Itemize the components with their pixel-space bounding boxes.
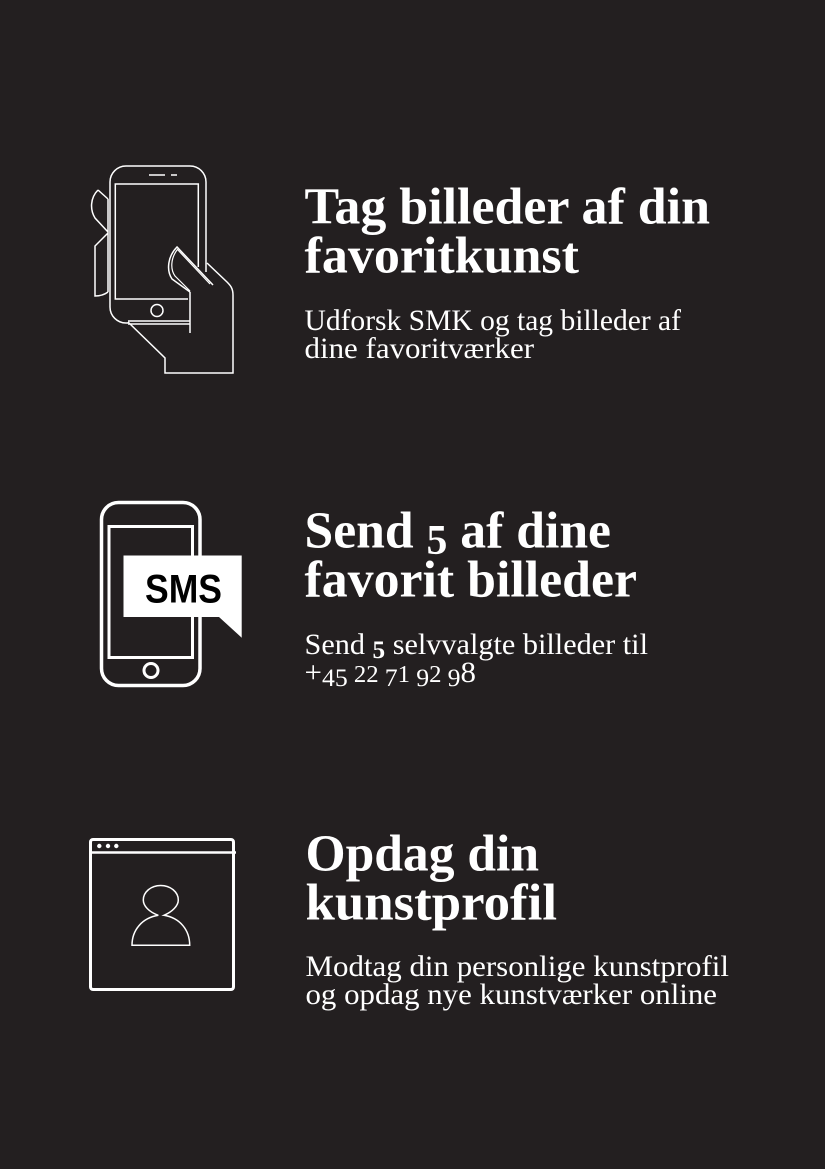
icon: phone with SMS bubble — [102, 502, 242, 686]
text: step 2 description: 1 — [398, 662, 416, 688]
text: step 1 description — [304, 304, 681, 365]
heading: step 3: kunstprofil — [306, 874, 557, 932]
heading: step 3: Opdag din — [306, 826, 539, 882]
icon: hand holding phone — [92, 166, 233, 373]
heading: step 1 — [304, 178, 710, 284]
text: step 3 description — [306, 950, 729, 1011]
text: step 3 description: og opdag nye kunstværker online — [306, 978, 717, 1011]
text: step 2 description: 7 — [385, 665, 398, 692]
text: step 2 description: 2 — [429, 662, 448, 688]
label: SMS: SMS — [145, 568, 222, 612]
heading: step 1: favoritkunst — [304, 228, 580, 284]
heading: step 2: af dine — [447, 502, 611, 560]
heading: step 3 — [306, 826, 557, 932]
icon: user — [132, 886, 190, 945]
heading: step 1: Tag billeder af din — [304, 178, 710, 236]
text: step 2 description: 45 — [322, 665, 348, 692]
icon: browser window with user profile — [90, 840, 236, 990]
text: step 2 description: selvvalgte billeder til — [385, 628, 648, 661]
text: step 2 description: 8 — [461, 656, 476, 689]
heading: step 2 — [304, 502, 637, 608]
text: step 1 description: Udforsk SMK og tag billeder af — [304, 304, 681, 337]
text: step 2 description: 22 — [348, 662, 385, 688]
text: step 2 description: 9 — [448, 665, 461, 692]
heading: step 2: 5 — [427, 518, 447, 564]
heading: step 2: Send — [304, 502, 414, 560]
text: step 3 description: Modtag din personlige kunstprofil — [306, 950, 729, 983]
text: step 2 description: 9 — [416, 665, 429, 692]
text: step 2 description — [304, 628, 648, 692]
heading: step 2: favorit billeder — [304, 552, 637, 608]
text: step 2 description: Send — [304, 628, 364, 661]
text: step 2 description: 5 — [373, 637, 385, 664]
text: step 1 description: dine favoritværker — [304, 332, 534, 365]
text: step 2 description: + — [304, 656, 321, 689]
icon: speech bubble — [124, 556, 242, 638]
